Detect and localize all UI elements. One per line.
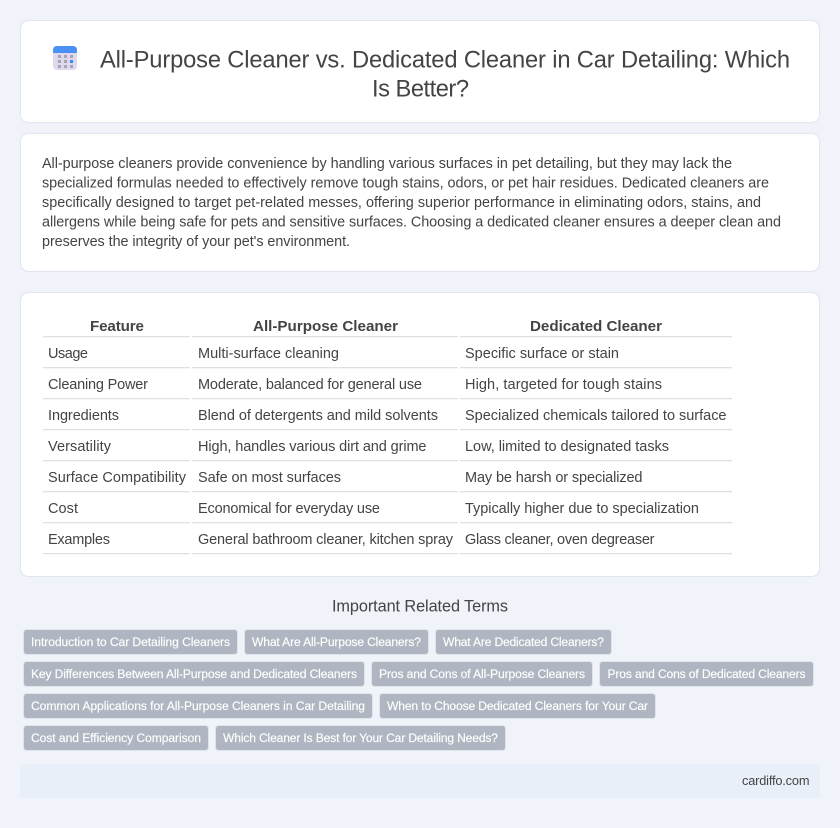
row: surface compatibility: [48, 470, 642, 486]
tag: What Are Dedicated Cleaners?: [443, 635, 604, 649]
row: ingredients: Ingredients: [48, 408, 119, 424]
row: ingredients: [48, 408, 726, 424]
tag: [24, 694, 372, 718]
footer: [20, 764, 820, 798]
title: All-Purpose Cleaner vs. Dedicated Cleaner in Car Detailing: Which: [100, 48, 790, 74]
tag: Which Cleaner Is Best for Your Car Detailing Needs?: [223, 731, 498, 745]
row: versatility: High, handles various dirt and grime: [198, 439, 426, 455]
row: ingredients: Blend of detergents and mild solvents: [198, 408, 438, 424]
row: usage: Multi-surface cleaning: [198, 346, 339, 362]
text block: summary paragraph: allergens while being safe for pets and sensitive surfaces. Choosing a dedicated cleaner ensures a deeper clean and: [42, 214, 781, 230]
row: cleaning power: High, targeted for tough stains: [465, 377, 662, 393]
row: examples: General bathroom cleaner, kitchen spray: [198, 532, 454, 548]
tag: Key Differences Between All-Purpose and Dedicated Cleaners: [31, 667, 357, 681]
text block: summary paragraph: specifically designed to target pet-related messes, offering superior performance in eliminating odors, stains, and: [42, 195, 761, 211]
tag: [380, 694, 656, 718]
row: cost: Typically higher due to specialization: [465, 501, 699, 517]
tag: [244, 630, 428, 654]
tag: [600, 662, 814, 686]
row: surface compatibility: May be harsh or specialized: [465, 470, 642, 486]
tag: [216, 726, 506, 750]
tag: [24, 662, 364, 686]
text block: summary paragraph: All-purpose cleaners provide convenience by handling various surfaces in pet detailing, but they may lack the: [42, 156, 732, 172]
heading: important related terms: Important Related Terms: [332, 598, 508, 616]
row: cost: Economical for everyday use: [198, 501, 380, 517]
tag: When to Choose Dedicated Cleaners for Your Car: [387, 699, 648, 713]
text block: summary paragraph: [42, 156, 781, 250]
table header row: Feature: [90, 318, 144, 335]
title: [100, 48, 790, 102]
tag: Introduction to Car Detailing Cleaners: [31, 635, 230, 649]
row: cleaning power: Moderate, balanced for general use: [198, 377, 422, 393]
icon: calendar: [53, 46, 77, 70]
row: examples: Examples: [48, 532, 110, 548]
row: surface compatibility: Surface Compatibility: [48, 470, 187, 486]
table row lines: [43, 336, 732, 554]
related terms tags: [24, 630, 814, 750]
panel: introduction text: [20, 134, 820, 272]
tag: What Are All-Purpose Cleaners?: [252, 635, 421, 649]
row: usage: Specific surface or stain: [465, 346, 619, 362]
title: Is Better?: [372, 76, 469, 102]
tag: Pros and Cons of Dedicated Cleaners: [608, 667, 806, 681]
panel: title header: [20, 20, 820, 122]
row: surface compatibility: Safe on most surfaces: [198, 470, 341, 486]
row: usage: Usage: [48, 346, 88, 362]
row: examples: [48, 532, 655, 548]
tag: [24, 726, 208, 750]
row: cleaning power: [48, 377, 662, 393]
row: versatility: Versatility: [48, 439, 112, 455]
tag: [372, 662, 592, 686]
tag: Common Applications for All-Purpose Cleaners in Car Detailing: [31, 699, 365, 713]
row: ingredients: Specialized chemicals tailored to surface: [465, 408, 726, 424]
table header row: Dedicated Cleaner: [530, 318, 662, 335]
panel: comparison table: [20, 292, 820, 576]
text block: summary paragraph: specialized formulas needed to effectively remove tough stains, odors, or pet hair residues. Dedicated cleaners are: [42, 176, 769, 192]
row: versatility: Low, limited to designated tasks: [465, 439, 669, 455]
row: versatility: [48, 439, 669, 455]
row: cleaning power: Cleaning Power: [48, 377, 148, 393]
row: usage: [48, 346, 619, 362]
tag: Cost and Efficiency Comparison: [31, 731, 201, 745]
table header row: All-Purpose Cleaner: [253, 318, 398, 335]
row: cost: [48, 501, 699, 517]
tag: Pros and Cons of All-Purpose Cleaners: [379, 667, 585, 681]
table header row: [90, 318, 662, 335]
tag: [436, 630, 612, 654]
row: examples: Glass cleaner, oven degreaser: [465, 532, 655, 548]
text block: summary paragraph: preserves the integrity of your pet's environment.: [42, 234, 350, 250]
tag: [24, 630, 238, 654]
row: cost: Cost: [48, 501, 78, 517]
footer: cardiffo.com: [742, 773, 810, 788]
